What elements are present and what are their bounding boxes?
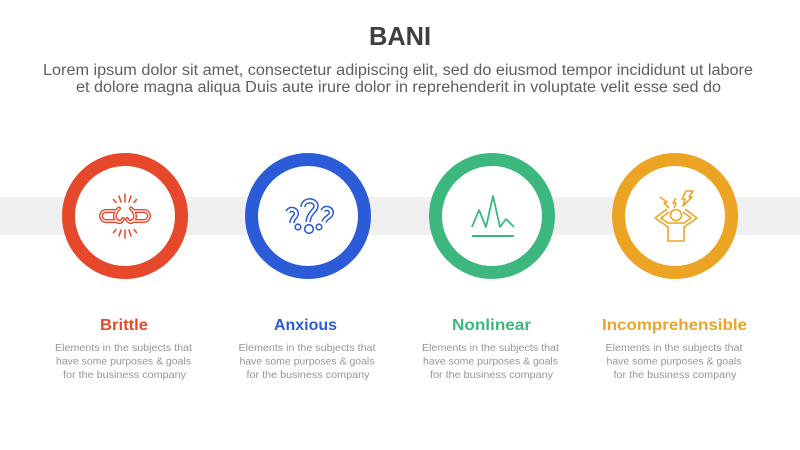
ring: anxious [252,160,364,272]
description: anxious: have some purposes & goals [240,356,374,368]
heading: incomprehensible: Incomprehensible [602,317,747,334]
description: anxious [238,342,376,381]
subtitle text block: Lorem ipsum dolor sit amet, consectetur adipiscing elit, sed do eiusmod tempor incididunt ut labore [43,62,753,79]
subtitle text block: et dolore magna aliqua Duis aute irure dolor in reprehenderit in voluptate velit esse sed do [76,79,721,96]
ring: incomprehensible [618,160,732,272]
icon: stressed person [655,191,697,241]
panel: anxious [238,160,376,381]
heading: anxious: Anxious [274,317,337,334]
ring: brittle [68,160,182,272]
description: brittle: for the business company [63,369,187,381]
description: brittle: have some purposes & goals [56,356,191,368]
background band [0,197,800,235]
description: brittle: Elements in the subjects that [55,342,192,354]
panel: incomprehensible [602,160,747,381]
panel: brittle [55,160,192,381]
description: incomprehensible: have some purposes & goals [606,356,742,368]
description: nonlinear [422,342,559,381]
description: incomprehensible [606,342,743,381]
icon: nonlinear chart [472,196,514,236]
subtitle text block [43,62,753,96]
heading: brittle: Brittle [100,317,148,334]
title: BANI [369,21,431,51]
description: anxious: for the business company [246,369,370,381]
panel: nonlinear [422,160,559,381]
description: anxious: Elements in the subjects that [238,342,376,354]
icon: question marks [288,201,331,233]
heading: nonlinear: Nonlinear [452,317,531,334]
description: incomprehensible: for the business company [614,369,737,381]
description: brittle [55,342,192,381]
icon: broken chain [101,194,149,238]
description: nonlinear: Elements in the subjects that [422,342,559,354]
description: nonlinear: for the business company [430,369,554,381]
ring: nonlinear [436,160,548,272]
description: incomprehensible: Elements in the subjects that [606,342,743,354]
description: nonlinear: have some purposes & goals [423,356,558,368]
